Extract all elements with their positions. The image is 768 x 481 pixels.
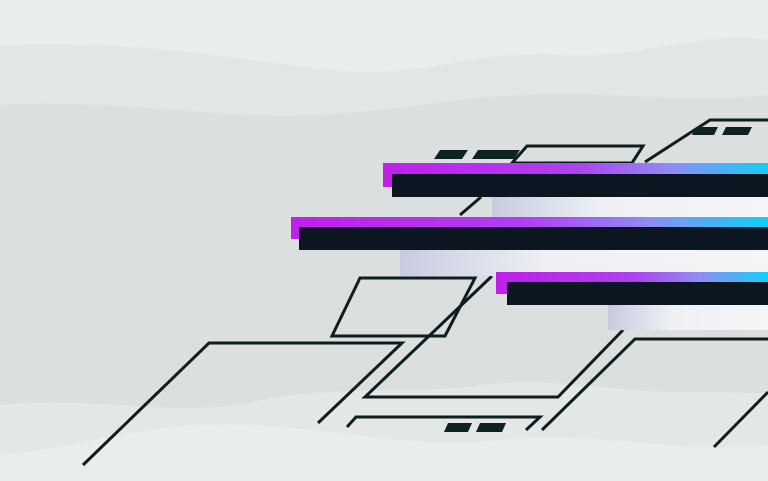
bar 1 <box>383 163 768 197</box>
small dark blocks <box>434 127 752 432</box>
bar 3 <box>496 272 768 305</box>
bar 2 <box>291 217 768 250</box>
light shadow panels <box>400 197 768 330</box>
outlined panels <box>83 120 768 465</box>
